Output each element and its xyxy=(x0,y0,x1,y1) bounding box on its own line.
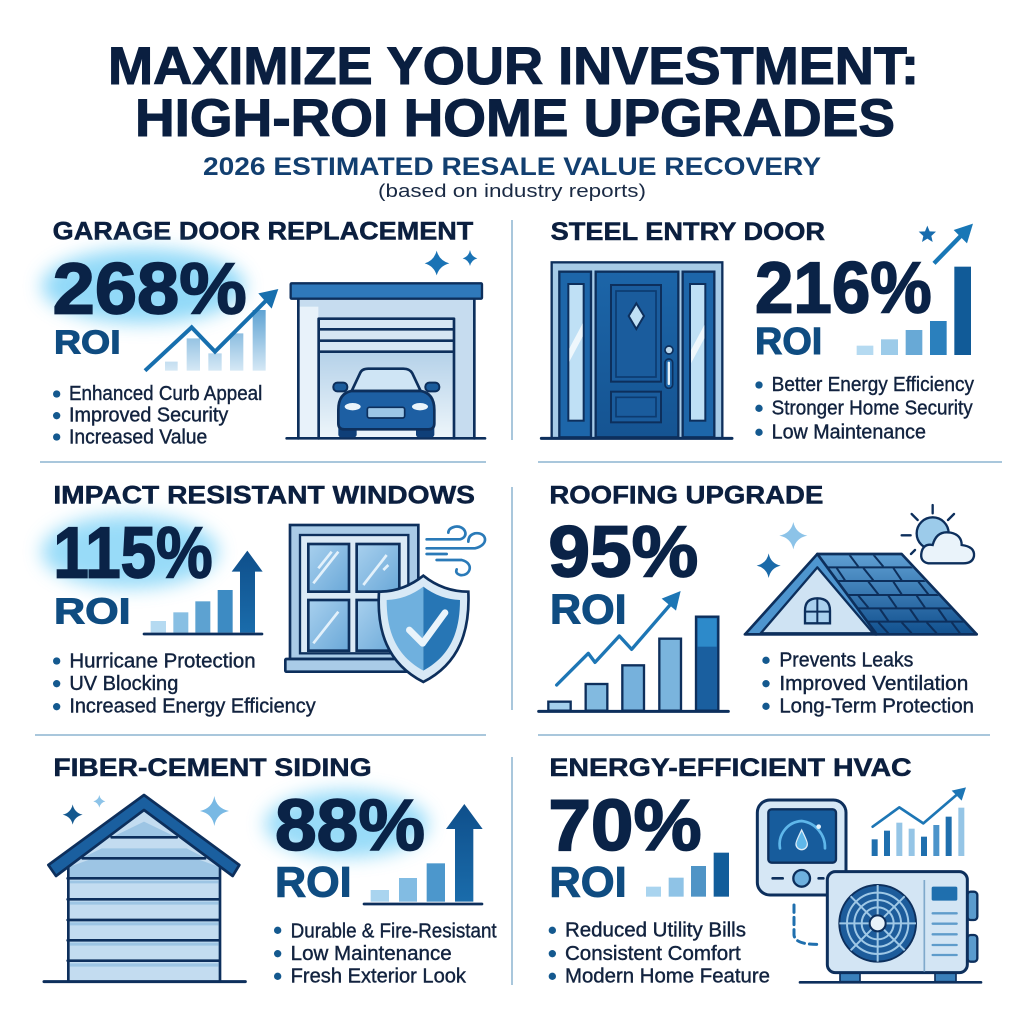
bar chart xyxy=(646,853,729,897)
benefits list: Stronger Home Security xyxy=(772,397,973,419)
panel: energy-efficient hvac xyxy=(548,754,981,988)
roi label: ROI xyxy=(549,859,627,907)
glow xyxy=(42,249,245,323)
icon: sparkles xyxy=(63,795,229,826)
roi value: 268% xyxy=(53,249,247,329)
benefits list xyxy=(755,374,974,443)
icon: roof xyxy=(745,554,977,634)
glow xyxy=(42,515,218,588)
icon: sun and cloud xyxy=(902,505,974,563)
icon: house with siding xyxy=(44,795,245,982)
icon: sparkles xyxy=(757,522,807,578)
heading: GARAGE DOOR REPLACEMENT xyxy=(53,217,473,245)
benefits list: Reduced Utility Bills xyxy=(565,920,746,942)
roi label: ROI xyxy=(275,859,352,907)
benefits list: Modern Home Feature xyxy=(565,966,770,988)
benefits list xyxy=(274,920,497,988)
growth chart xyxy=(145,289,278,371)
panel: garage door replacement xyxy=(42,217,485,448)
bar chart with arrow xyxy=(144,551,263,634)
benefits list: Prevents Leaks xyxy=(779,650,913,672)
benefits list: Better Energy Efficiency xyxy=(772,374,974,396)
subtitle: 2026 ESTIMATED RESALE VALUE RECOVERY xyxy=(203,153,821,181)
connector: dashed line xyxy=(794,905,820,944)
title xyxy=(108,37,919,148)
panel: fiber-cement siding xyxy=(44,754,497,988)
benefits list: Low Maintenance xyxy=(291,943,452,965)
heading: ENERGY-EFFICIENT HVAC xyxy=(549,754,912,782)
roi value: 216% xyxy=(755,249,932,329)
bar chart with arrow xyxy=(364,804,483,904)
benefits list: UV Blocking xyxy=(69,673,178,695)
benefits list: Improved Security xyxy=(69,405,228,427)
roi value: 115% xyxy=(53,513,213,593)
benefits list: Improved Ventilation xyxy=(779,673,968,695)
benefits list: Fresh Exterior Look xyxy=(291,966,467,988)
title: MAXIMIZE YOUR INVESTMENT: xyxy=(108,37,919,96)
benefits list: Durable & Fire-Resistant xyxy=(291,920,497,942)
benefits list: Low Maintenance xyxy=(772,421,926,443)
benefits list xyxy=(549,920,770,988)
roi value: 70% xyxy=(548,786,702,866)
bar chart xyxy=(857,267,971,355)
icon: window xyxy=(285,525,418,672)
roi label: ROI xyxy=(550,586,627,632)
icon: thermostat xyxy=(757,800,846,895)
icon: garage with car xyxy=(287,250,485,438)
roi value: 95% xyxy=(548,513,698,593)
bar chart with trend line xyxy=(539,591,728,711)
benefits list: Increased Value xyxy=(69,426,207,448)
icon: entry door xyxy=(541,262,732,438)
icon: trend chart xyxy=(872,787,966,856)
roi label: ROI xyxy=(54,324,121,361)
panel: impact resistant windows xyxy=(42,481,485,718)
panel: steel entry door xyxy=(541,218,974,443)
benefits list: Enhanced Curb Appeal xyxy=(69,383,262,405)
benefits list: Increased Energy Efficiency xyxy=(69,696,316,718)
roi label: ROI xyxy=(755,320,822,362)
source note: (based on industry reports) xyxy=(378,181,646,201)
benefits list xyxy=(53,383,262,448)
benefits list xyxy=(762,650,974,718)
benefits list: Consistent Comfort xyxy=(565,943,741,965)
title: HIGH-ROI HOME UPGRADES xyxy=(135,89,895,148)
icon: wind xyxy=(427,527,485,575)
heading: ROOFING UPGRADE xyxy=(549,481,823,509)
benefits list: Long-Term Protection xyxy=(779,696,974,718)
roi value: 88% xyxy=(275,786,425,866)
icon: rising arrow and star xyxy=(919,224,973,263)
glow xyxy=(265,791,428,857)
roi label: ROI xyxy=(54,590,131,631)
panel: roofing upgrade xyxy=(539,481,977,718)
heading: STEEL ENTRY DOOR xyxy=(551,218,825,246)
benefits list xyxy=(53,650,316,718)
heading: IMPACT RESISTANT WINDOWS xyxy=(53,481,475,509)
icon: shield with check xyxy=(379,576,469,682)
benefits list: Hurricane Protection xyxy=(69,650,256,672)
heading: FIBER-CEMENT SIDING xyxy=(53,754,372,782)
icon: outdoor ac unit xyxy=(800,872,981,982)
